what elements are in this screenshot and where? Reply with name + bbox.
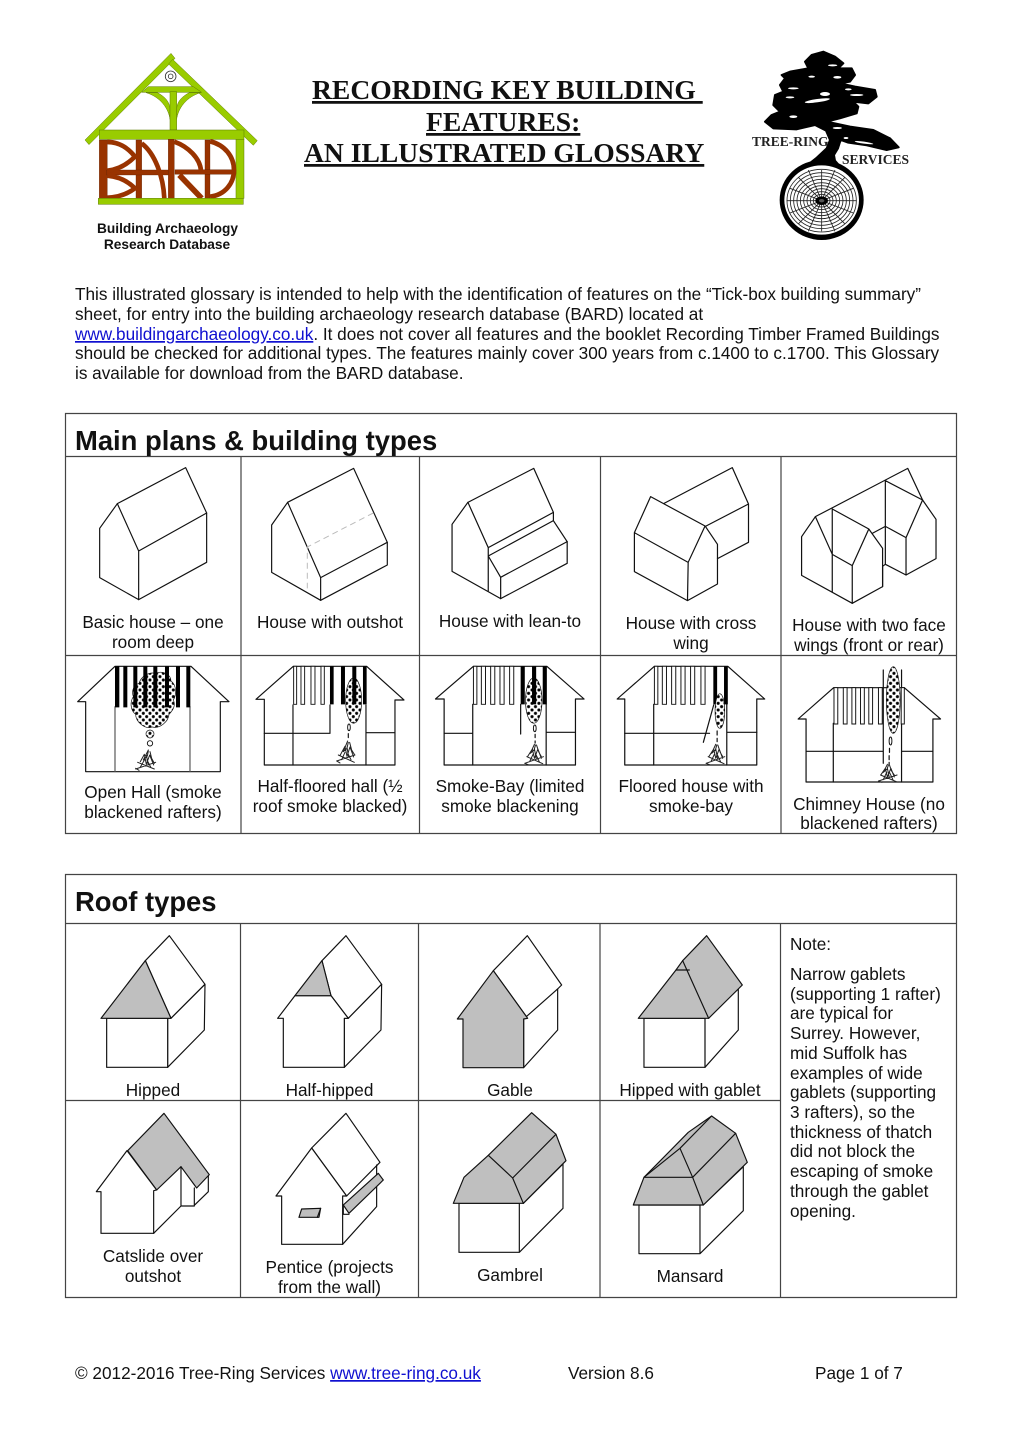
cell: floored house with smoke-bay <box>617 666 765 816</box>
cell: gable roof <box>457 936 562 1100</box>
cell: basic house: Basic house – one <box>82 612 224 632</box>
cell: catslide over outshot: Catslide over <box>103 1246 203 1266</box>
intro text block: sheet, for entry into the building archaeology research database (BARD) located at <box>75 304 703 324</box>
cell: half-hipped roof <box>278 936 382 1100</box>
logo: Tree-Ring Services: SERVICES <box>842 152 909 167</box>
logo: Tree-Ring Services: TREE-RING <box>752 134 829 149</box>
cell: house with outshot <box>257 468 403 632</box>
note text: thickness of thatch <box>790 1122 932 1142</box>
heading: main plans: Main plans & building types <box>75 425 437 456</box>
table grid: main plans <box>66 414 956 834</box>
cell: house with two face wings <box>792 468 946 655</box>
note text: Surrey. However, <box>790 1023 920 1043</box>
cell: hipped roof <box>101 936 205 1100</box>
cell: open hall <box>78 666 229 822</box>
cell: open hall: Open Hall (smoke <box>84 782 222 802</box>
note text: Note: <box>790 934 831 954</box>
intro text block: This illustrated glossary is intended to help with the identification of features on the “Tick-box building summary” <box>75 284 921 304</box>
cell: half-hipped roof: Half-hipped <box>286 1080 373 1100</box>
cell: hipped roof: Hipped <box>126 1080 180 1100</box>
note text: 3 rafters), so the <box>790 1102 915 1122</box>
cell: half-floored hall <box>253 666 407 816</box>
cell: gable roof: Gable <box>487 1080 533 1100</box>
cell: half-floored hall: Half-floored hall (½ <box>257 776 403 796</box>
cell: house with cross wing: wing <box>672 633 709 653</box>
panel: roof types <box>66 874 956 1298</box>
cell: house with lean-to <box>439 468 581 631</box>
logo: BARD timber-frame house <box>85 53 257 252</box>
cell: basic house <box>82 468 224 652</box>
footer: © 2012-2016 Tree-Ring Services www.tree-ring.co.uk <box>75 1363 481 1383</box>
cell: house with lean-to: House with lean-to <box>439 611 581 631</box>
title: FEATURES: <box>426 106 580 137</box>
table grid: roof types <box>66 874 956 1298</box>
cell: hipped with gablet: Hipped with gablet <box>619 1080 761 1100</box>
cell: house with two face wings: House with two face <box>792 615 946 635</box>
cell: floored house with smoke-bay: smoke-bay <box>649 796 733 816</box>
note text: through the gablet <box>790 1181 929 1201</box>
cell: basic house: room deep <box>112 632 194 652</box>
title <box>304 74 704 168</box>
note text: escaping of smoke <box>790 1161 933 1181</box>
footer: Version 8.6 <box>568 1363 654 1383</box>
cell: house with two face wings: wings (front or rear) <box>793 635 944 655</box>
cell: smoke-bay: smoke blackening <box>441 796 579 816</box>
note text: opening. <box>790 1201 856 1221</box>
note text: (supporting 1 rafter) <box>790 984 941 1004</box>
cell: pentice: from the wall) <box>278 1277 381 1297</box>
intro text block: www.buildingarchaeology.co.uk. It does not cover all features and the booklet Recording Timber Framed Buildings <box>74 324 939 344</box>
footer <box>75 1363 903 1383</box>
cell: catslide over outshot: outshot <box>125 1266 181 1286</box>
logo: BARD timber-frame house: Research Database <box>104 237 231 252</box>
note text: did not block the <box>790 1141 915 1161</box>
cell: hipped with gablet <box>619 936 761 1100</box>
cell: gambrel roof <box>453 1113 566 1285</box>
note text: examples of wide <box>790 1063 923 1083</box>
title: RECORDING KEY BUILDING <box>312 74 703 105</box>
cell: pentice: Pentice (projects <box>266 1257 393 1277</box>
title: AN ILLUSTRATED GLOSSARY <box>304 137 704 168</box>
cell: mansard roof <box>633 1116 747 1286</box>
cell: open hall: blackened rafters) <box>84 802 222 822</box>
note text: are typical for <box>790 1003 893 1023</box>
cell: house with cross wing <box>626 468 756 653</box>
cell: chimney house <box>793 667 945 833</box>
cell: half-floored hall: roof smoke blacked) <box>253 796 407 816</box>
cell: chimney house: blackened rafters) <box>800 813 938 833</box>
note text: Narrow gablets <box>790 964 905 984</box>
cell: catslide over outshot <box>96 1113 209 1286</box>
cell: mansard roof: Mansard <box>657 1266 723 1286</box>
logo: BARD timber-frame house: Building Archaeology <box>97 221 238 236</box>
intro text block: is available for download from the BARD database. <box>75 363 464 383</box>
cell: house with outshot: House with outshot <box>257 612 403 632</box>
footer: Page 1 of 7 <box>815 1363 903 1383</box>
heading: roof types: Roof types <box>75 886 217 917</box>
note text: mid Suffolk has <box>790 1043 907 1063</box>
intro text block: should be checked for additional types. The features mainly cover 300 years from c.1400 to c.1700. This Glossary <box>75 343 940 363</box>
cell: floored house with smoke-bay: Floored house with <box>618 776 764 796</box>
panel: main plans and building types <box>66 414 956 834</box>
intro text block <box>74 284 940 383</box>
cell: gambrel roof: Gambrel <box>477 1265 543 1285</box>
cell: smoke-bay: Smoke-Bay (limited <box>436 776 584 796</box>
cell: house with cross wing: House with cross <box>626 613 756 633</box>
note text: gablets (supporting <box>790 1082 936 1102</box>
cell: smoke-bay <box>436 666 584 816</box>
note text <box>790 934 941 1221</box>
cell: pentice <box>266 1113 393 1297</box>
logo: Tree-Ring Services <box>752 52 909 240</box>
cell: chimney house: Chimney House (no <box>793 794 945 814</box>
